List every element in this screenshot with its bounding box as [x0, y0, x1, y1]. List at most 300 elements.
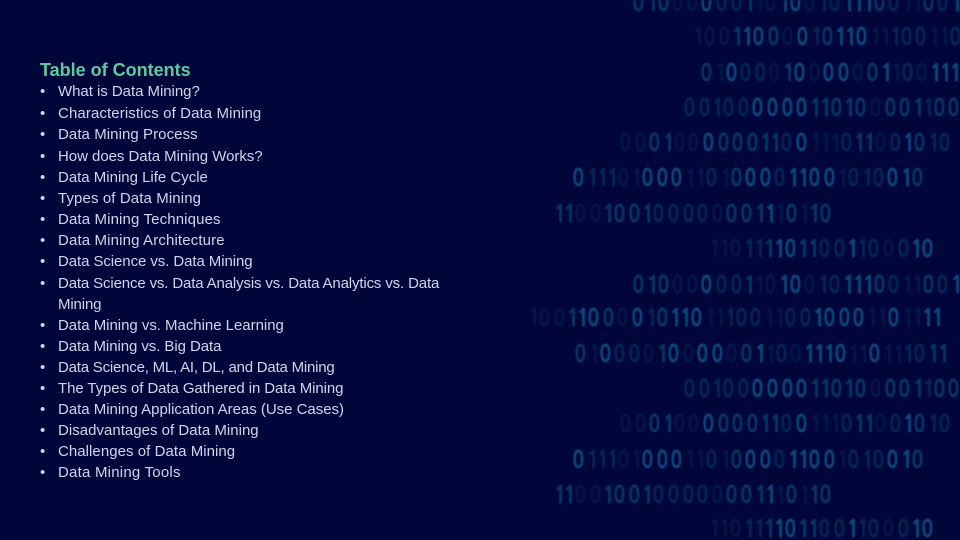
binary row 15: 0	[711, 483, 723, 507]
binary row 4: 0	[698, 96, 710, 120]
binary row 7: 1	[774, 202, 784, 226]
binary row 14	[572, 448, 923, 472]
binary row 4: 0	[781, 96, 793, 120]
binary row 13: 0	[795, 412, 807, 436]
binary row 4: 1	[844, 96, 854, 120]
binary row 3: 0	[852, 61, 863, 85]
binary row 11: 0	[682, 342, 694, 366]
list item: Data Science, ML, AI, DL, and Data Mining	[58, 359, 335, 376]
binary row 7: 0	[653, 202, 664, 226]
binary row 14: 1	[797, 448, 807, 472]
binary row 13: 0	[840, 412, 852, 436]
binary row 15: 1	[754, 483, 764, 507]
binary row 11: 0	[711, 342, 723, 366]
binary row 6: 0	[572, 166, 584, 190]
binary row 12: 0	[899, 377, 910, 401]
binary row 6: 1	[900, 166, 910, 190]
binary row 14: 1	[719, 448, 729, 472]
binary row 9: 0	[765, 273, 776, 297]
binary row 10: 0	[538, 306, 550, 330]
binary row 11: 1	[823, 342, 833, 366]
binary row 13: 0	[634, 412, 646, 436]
binary row 9: 0	[922, 273, 934, 297]
binary row 13: 1	[760, 412, 770, 436]
binary row 9: 0	[657, 273, 669, 297]
binary row 5: 1	[829, 131, 839, 155]
binary row 6: 0	[823, 166, 835, 190]
binary row 5: 1	[903, 131, 913, 155]
binary row 10: 1	[680, 306, 690, 330]
binary row 14: 0	[745, 448, 756, 472]
binary row 9: 0	[888, 273, 899, 297]
binary row 14: 0	[705, 448, 717, 472]
binary row 15: 1	[564, 483, 574, 507]
binary row 5: 1	[760, 131, 770, 155]
binary row 13: 0	[732, 412, 743, 436]
binary row 14: 0	[774, 448, 785, 472]
binary row 10: 0	[838, 306, 850, 330]
list item: Data Mining vs. Machine Learning	[58, 317, 284, 334]
binary row 12: 0	[737, 377, 749, 401]
binary row 15: 1	[809, 483, 819, 507]
binary row 8: 0	[833, 237, 845, 261]
binary row 11: 0	[697, 342, 708, 366]
binary row 4: 0	[899, 96, 910, 120]
binary row 15: 0	[682, 483, 694, 507]
binary row 8: 1	[857, 237, 867, 261]
binary row 12: 1	[844, 377, 854, 401]
list item: Data Science vs. Data Analysis vs. Data Analytics vs. Data	[58, 275, 439, 292]
binary row 10: 1	[931, 306, 941, 330]
binary row 15: 0	[697, 483, 708, 507]
binary row 10: 1	[645, 306, 655, 330]
list item: Mining	[58, 296, 101, 313]
binary row 14: 0	[759, 448, 771, 472]
list item: Challenges of Data Mining	[58, 443, 235, 460]
binary row 5: 0	[840, 131, 852, 155]
binary row 2: 1	[742, 25, 752, 49]
binary row 13: 0	[781, 412, 792, 436]
binary row 12: 0	[869, 377, 881, 401]
binary row 8: 1	[847, 237, 857, 261]
binary row 5: 0	[688, 131, 699, 155]
binary row 4: 0	[855, 96, 866, 120]
binary row 9: 0	[701, 273, 712, 297]
binary row 13: 0	[673, 412, 685, 436]
binary row 15: 1	[554, 483, 564, 507]
list item: How does Data Mining Works?	[58, 148, 263, 165]
binary row 14: 0	[730, 448, 742, 472]
binary row 10: 0	[750, 306, 761, 330]
binary row 15: 0	[614, 483, 625, 507]
binary row 6: 0	[656, 166, 668, 190]
binary row 5: 0	[702, 131, 714, 155]
binary row 15: 0	[785, 483, 797, 507]
binary row 2: 0	[703, 25, 715, 49]
binary row 4: 0	[933, 96, 945, 120]
binary row 12: 1	[819, 377, 829, 401]
binary row 3: 0	[837, 61, 849, 85]
list item: Data Mining Application Areas (Use Cases)	[58, 401, 344, 418]
binary row 4: 0	[737, 96, 749, 120]
binary row 4: 0	[884, 96, 896, 120]
binary row 13: 0	[717, 412, 729, 436]
binary row 10: 1	[866, 306, 876, 330]
binary row 4: 0	[766, 96, 778, 120]
binary row 11: 0	[834, 342, 846, 366]
binary row 10: 1	[724, 306, 734, 330]
binary row 10: 0	[799, 306, 811, 330]
binary row 5: 0	[717, 131, 729, 155]
binary row 11: 1	[764, 342, 774, 366]
binary row 13: 0	[619, 412, 631, 436]
binary row 5: 1	[927, 131, 937, 155]
binary row 4: 1	[819, 96, 829, 120]
binary row 14: 0	[642, 448, 653, 472]
binary row 12: 0	[698, 377, 710, 401]
binary row 13: 0	[938, 412, 950, 436]
binary row 2: 0	[796, 25, 808, 49]
binary row 2: 1	[889, 25, 899, 49]
binary row 7: 0	[820, 202, 831, 226]
binary row 10: 0	[824, 306, 835, 330]
list item: Data Mining vs. Big Data	[58, 338, 221, 355]
list item: Data Mining Process	[58, 126, 198, 143]
binary row 11: 0	[790, 342, 801, 366]
binary row 10: 0	[784, 306, 796, 330]
list item: Data Mining Architecture	[58, 232, 225, 249]
binary row 3: 0	[823, 61, 834, 85]
binary row 9: 1	[778, 273, 788, 297]
binary row 5: 0	[875, 131, 886, 155]
binary row 13: 0	[875, 412, 886, 436]
binary row 3: 0	[769, 61, 780, 85]
binary row 7: 0	[589, 202, 601, 226]
binary row 7: 0	[711, 202, 723, 226]
list item	[40, 273, 439, 315]
binary row 6: 0	[848, 166, 859, 190]
binary row 15: 1	[764, 483, 774, 507]
binary row 2: 1	[810, 25, 820, 49]
binary row 14: 0	[671, 448, 682, 472]
binary row 8: 0	[784, 237, 796, 261]
binary row 12: 0	[855, 377, 866, 401]
binary row 11: 1	[882, 342, 892, 366]
binary row 6: 1	[787, 166, 797, 190]
binary row 3: 0	[740, 61, 751, 85]
binary row 5: 0	[914, 131, 925, 155]
binary row 6	[572, 166, 923, 190]
binary row 8: 1	[911, 237, 921, 261]
binary row 4: 0	[830, 96, 842, 120]
binary row 6: 0	[671, 166, 682, 190]
binary row 11: 1	[927, 342, 937, 366]
binary row 6: 0	[730, 166, 742, 190]
binary row 6: 1	[606, 166, 616, 190]
binary row 14: 1	[586, 448, 596, 472]
binary row 9: 0	[632, 273, 644, 297]
binary row 5: 0	[889, 131, 901, 155]
binary row 13: 1	[662, 412, 672, 436]
binary row 6: 1	[719, 166, 729, 190]
binary row 2: 1	[845, 25, 855, 49]
binary row 8: 1	[763, 237, 773, 261]
binary row 8: 0	[922, 237, 933, 261]
binary row 8: 1	[773, 237, 783, 261]
binary row 11: 1	[902, 342, 912, 366]
binary row 10: 1	[921, 306, 931, 330]
binary row 7: 1	[799, 202, 809, 226]
binary row 10	[528, 306, 941, 330]
binary row 6: 1	[596, 166, 606, 190]
binary row 11: 0	[628, 342, 640, 366]
binary row 9: 0	[715, 273, 727, 297]
binary row 5: 0	[619, 131, 631, 155]
binary row 9: 0	[804, 273, 815, 297]
binary row 10: 1	[813, 306, 823, 330]
binary row 10: 1	[670, 306, 680, 330]
binary row 9: 1	[744, 273, 754, 297]
binary row 2: 1	[938, 25, 948, 49]
binary row 14: 1	[900, 448, 910, 472]
binary row 11: 0	[869, 342, 880, 366]
binary row 12: 0	[830, 377, 842, 401]
binary row 10: 0	[553, 306, 565, 330]
binary row 8: 0	[868, 237, 879, 261]
binary row 14: 0	[848, 448, 859, 472]
binary row 10: 1	[567, 306, 577, 330]
binary row 10: 0	[691, 306, 702, 330]
binary row 8	[708, 237, 933, 261]
binary row 9: 1	[852, 273, 862, 297]
binary row 14: 1	[694, 448, 705, 472]
binary row 15: 1	[603, 483, 613, 507]
binary row 12: 0	[683, 377, 695, 401]
binary row 11: 0	[614, 342, 625, 366]
binary row 13: 0	[702, 412, 714, 436]
binary row 14: 0	[617, 448, 629, 472]
binary row 12: 1	[809, 377, 819, 401]
binary row 10: 1	[901, 306, 911, 330]
binary row 2: 0	[753, 25, 764, 49]
binary row 7: 1	[754, 202, 764, 226]
binary row 14: 1	[596, 448, 606, 472]
binary row 11: 1	[858, 342, 868, 366]
binary row 10: 1	[704, 306, 714, 330]
binary row 9: 1	[901, 273, 911, 297]
binary row 15: 0	[667, 483, 679, 507]
binary row 14: 1	[684, 448, 695, 472]
binary row 3: 1	[890, 61, 900, 85]
binary row 5: 1	[819, 131, 829, 155]
binary row 14: 0	[808, 448, 820, 472]
binary row 2: 1	[879, 25, 889, 49]
binary row 7: 0	[785, 202, 797, 226]
binary row 12: 0	[884, 377, 896, 401]
binary row 6: 1	[861, 166, 871, 190]
binary row 7: 0	[667, 202, 679, 226]
binary row 2: 0	[915, 25, 926, 49]
binary row 15: 1	[799, 483, 809, 507]
binary row 3: 1	[782, 61, 793, 85]
binary row 12: 0	[796, 377, 807, 401]
binary row 8: 1	[708, 237, 719, 261]
binary row 3: 0	[901, 61, 913, 85]
binary row 5: 0	[781, 131, 792, 155]
binary row 8: 1	[743, 237, 753, 261]
binary row 13: 1	[770, 412, 780, 436]
binary row 9: 0	[828, 273, 840, 297]
binary row 12: 1	[712, 377, 722, 401]
binary row 3	[700, 61, 959, 85]
binary row 5: 0	[634, 131, 646, 155]
binary row 14: 1	[837, 448, 847, 472]
binary row 15: 0	[740, 483, 752, 507]
binary row 3: 0	[916, 61, 927, 85]
binary row 5: 1	[854, 131, 864, 155]
binary row 13: 1	[864, 412, 874, 436]
binary row 9: 1	[911, 273, 921, 297]
binary row 9: 0	[672, 273, 683, 297]
binary row 5: 0	[795, 131, 807, 155]
binary row 10: 0	[631, 306, 643, 330]
binary row 13: 0	[914, 412, 925, 436]
list item: Characteristics of Data Mining	[58, 105, 261, 122]
binary row 8: 0	[729, 237, 741, 261]
binary row 11: 0	[599, 342, 611, 366]
binary row 9: 0	[873, 273, 885, 297]
binary row 8: 0	[882, 237, 894, 261]
binary row 5: 0	[938, 131, 950, 155]
binary row 4: 1	[912, 96, 922, 120]
binary row 7: 1	[554, 202, 564, 226]
binary row 6: 0	[911, 166, 923, 190]
binary row 3: 1	[939, 61, 949, 85]
binary row 2: 0	[900, 25, 912, 49]
binary row 11: 0	[726, 342, 737, 366]
binary row 10: 1	[528, 306, 538, 330]
binary row 3: 1	[949, 61, 959, 85]
binary row 8: 1	[798, 237, 808, 261]
binary row 4: 1	[712, 96, 722, 120]
binary row 5: 0	[649, 131, 660, 155]
binary row 10: 1	[773, 306, 783, 330]
binary row 9: 0	[937, 273, 948, 297]
binary row 11: 0	[913, 342, 925, 366]
binary row 3: 0	[754, 61, 766, 85]
binary row 15: 0	[589, 483, 601, 507]
binary row 2: 0	[821, 25, 833, 49]
binary row 14: 0	[887, 448, 898, 472]
binary row 5: 1	[809, 131, 819, 155]
binary row 9: 1	[817, 273, 827, 297]
binary row 13: 1	[854, 412, 864, 436]
binary row 15: 1	[774, 483, 784, 507]
list item: Data Mining Techniques	[58, 211, 221, 228]
binary row 14: 0	[823, 448, 835, 472]
binary row 9: 0	[686, 273, 698, 297]
binary row 15: 0	[628, 483, 640, 507]
binary row 6: 1	[586, 166, 596, 190]
list item: Data Mining Tools	[58, 464, 181, 481]
binary row 3: 0	[700, 61, 712, 85]
binary row 10: 0	[602, 306, 614, 330]
binary row 14: 0	[872, 448, 884, 472]
binary row 6: 0	[705, 166, 717, 190]
binary row 2: 1	[692, 25, 703, 49]
binary row 2: 0	[856, 25, 867, 49]
binary row 12: 0	[781, 377, 793, 401]
binary row 4	[683, 96, 959, 120]
binary row 7: 0	[726, 202, 737, 226]
binary row 2: 1	[732, 25, 742, 49]
binary row 13: 0	[746, 412, 758, 436]
binary row 7: 1	[642, 202, 652, 226]
binary row 11: 0	[574, 342, 586, 366]
binary row 3: 1	[714, 61, 724, 85]
binary row 9: 1	[754, 273, 764, 297]
binary row 11: 1	[813, 342, 823, 366]
binary row 6: 0	[872, 166, 884, 190]
binary row 6: 0	[774, 166, 785, 190]
binary row 14: 0	[572, 448, 584, 472]
binary row 15	[554, 483, 831, 507]
binary row 11	[574, 342, 947, 366]
list item: Disadvantages of Data Mining	[58, 422, 259, 439]
binary row 2: 1	[928, 25, 938, 49]
binary row 6: 0	[745, 166, 756, 190]
binary row 11: 1	[848, 342, 858, 366]
binary row 4: 0	[752, 96, 763, 120]
binary row 15: 1	[642, 483, 652, 507]
binary row 9	[632, 273, 960, 297]
binary row 7: 0	[614, 202, 625, 226]
binary row 6: 0	[642, 166, 653, 190]
binary row 7: 1	[764, 202, 774, 226]
binary row 5: 1	[864, 131, 874, 155]
binary row 12: 1	[922, 377, 932, 401]
binary row 7: 0	[697, 202, 708, 226]
binary row 10: 1	[714, 306, 724, 330]
binary row 6: 1	[631, 166, 641, 190]
binary row 8: 1	[808, 237, 818, 261]
binary row 11: 1	[937, 342, 947, 366]
binary row 10: 1	[876, 306, 886, 330]
binary row 12: 0	[933, 377, 945, 401]
binary row 10: 0	[588, 306, 599, 330]
binary row 8: 1	[753, 237, 763, 261]
binary row 2: 0	[782, 25, 793, 49]
binary row 15: 0	[653, 483, 664, 507]
binary row 3: 1	[880, 61, 890, 85]
binary row 11: 0	[643, 342, 654, 366]
binary row 15: 0	[820, 483, 831, 507]
binary row 3: 0	[866, 61, 878, 85]
binary row 10: 0	[617, 306, 628, 330]
binary row 7: 0	[574, 202, 586, 226]
binary row 13: 0	[688, 412, 699, 436]
binary row 10: 0	[887, 306, 899, 330]
binary row 10: 1	[911, 306, 921, 330]
binary row 13: 0	[889, 412, 901, 436]
binary row 9: 0	[730, 273, 742, 297]
binary row 9: 1	[842, 273, 852, 297]
binary row 11: 1	[803, 342, 813, 366]
binary row 2: 0	[718, 25, 730, 49]
binary row 7: 0	[682, 202, 694, 226]
panel: table of contents	[40, 60, 440, 481]
binary row 4: 0	[869, 96, 881, 120]
